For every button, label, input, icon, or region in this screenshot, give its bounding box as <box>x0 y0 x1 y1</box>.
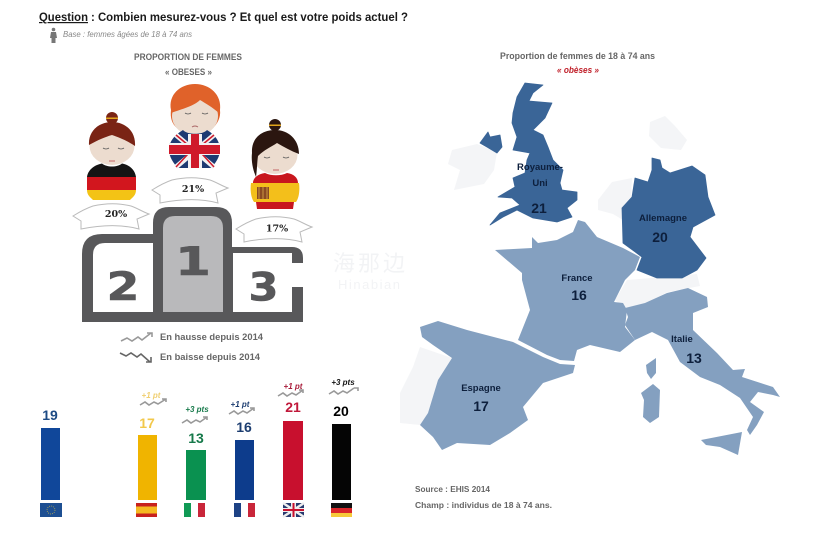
bar: Italy: 13 <box>188 430 204 446</box>
heading: left panel: « OBESES » <box>165 67 212 77</box>
ribbon: 20% <box>73 204 149 229</box>
source note: Source : EHIS 2014 <box>415 484 490 494</box>
bar: Spain: +1 pt <box>142 391 161 400</box>
label: France: 16 <box>571 287 587 303</box>
country: Spain <box>420 321 575 450</box>
label: France: France <box>561 273 593 284</box>
bar: United Kingdom: 21 <box>285 399 301 415</box>
source note: Champ : individus de 18 à 74 ans. <box>415 500 552 510</box>
label: Royaume-Uni <box>517 162 563 216</box>
bar chart <box>40 378 358 517</box>
label: France <box>561 273 593 303</box>
ribbon: 21%: 21% <box>182 184 204 195</box>
label: Espagne: Espagne <box>461 383 501 394</box>
bar: Italy <box>182 405 209 517</box>
watermark: 海那边 <box>333 251 405 276</box>
bar: Germany: +3 pts <box>331 378 355 387</box>
bar: Germany <box>329 378 358 517</box>
legend: rising: En hausse depuis 2014 <box>160 332 263 342</box>
neighbouring countries <box>400 116 700 425</box>
label: Royaume-Uni: 21 <box>531 200 547 216</box>
label: Espagne: 17 <box>473 398 489 414</box>
label: Allemagne: Allemagne <box>639 213 687 224</box>
bar: France: +1 pt <box>231 400 250 409</box>
ribbon: 17%: 17% <box>266 224 288 234</box>
label: Espagne <box>461 383 501 414</box>
label: Italie <box>671 334 702 366</box>
heading: map panel: Proportion de femmes de 18 à 74 ans <box>500 51 655 61</box>
bar: EU: 19 <box>42 407 58 423</box>
label: Italie: Italie <box>671 334 693 345</box>
title: Question <box>39 10 88 24</box>
country: France <box>495 220 640 361</box>
country: Germany <box>622 158 715 278</box>
ribbon: 20%: 20% <box>105 209 127 220</box>
map of Europe <box>400 83 780 455</box>
heading: map panel: « obèses » <box>557 65 599 75</box>
bar: Spain <box>136 391 166 517</box>
bar: United Kingdom: +1 pt <box>284 382 303 391</box>
base note with person icon: Base : femmes âgées de 18 à 74 ans <box>63 30 192 39</box>
country: United Kingdom <box>480 83 577 225</box>
bar: Italy: +3 pts <box>185 405 209 414</box>
heading: left panel <box>134 52 242 77</box>
watermark: Hinabian <box>338 277 400 292</box>
ribbon: 21% <box>152 178 228 203</box>
legend: falling: En baisse depuis 2014 <box>160 352 260 362</box>
label: Italie: 13 <box>686 350 702 366</box>
figure: British woman <box>169 84 220 168</box>
base note with person icon <box>50 28 192 43</box>
legend: falling <box>120 352 260 362</box>
ribbon: 17% <box>236 217 312 242</box>
country: Italy <box>625 288 780 455</box>
source note <box>415 484 552 510</box>
bar: France: 16 <box>236 419 252 435</box>
podium: 2 <box>106 265 140 310</box>
heading: left panel: PROPORTION DE FEMMES <box>134 52 242 62</box>
bar: United Kingdom <box>278 382 304 517</box>
bar: Germany: 20 <box>333 403 349 419</box>
bar: EU <box>40 407 62 517</box>
podium: 3 <box>248 266 278 310</box>
label: Allemagne: 20 <box>652 229 668 245</box>
podium: 1 <box>175 240 211 285</box>
figure: Spanish woman <box>251 119 299 209</box>
bar: Spain: 17 <box>139 415 155 431</box>
title: : Combien mesurez-vous ? Et quel est votre poids actuel ? <box>91 10 408 24</box>
label: Royaume-Uni: Uni <box>532 178 548 189</box>
legend: rising <box>121 332 263 342</box>
bar: France <box>229 400 255 517</box>
podium <box>82 207 303 322</box>
label: Allemagne <box>639 213 687 245</box>
heading: map panel <box>500 51 655 75</box>
label: Royaume-Uni: Royaume- <box>517 162 563 173</box>
watermark <box>333 251 405 292</box>
figure: German woman <box>87 112 136 200</box>
